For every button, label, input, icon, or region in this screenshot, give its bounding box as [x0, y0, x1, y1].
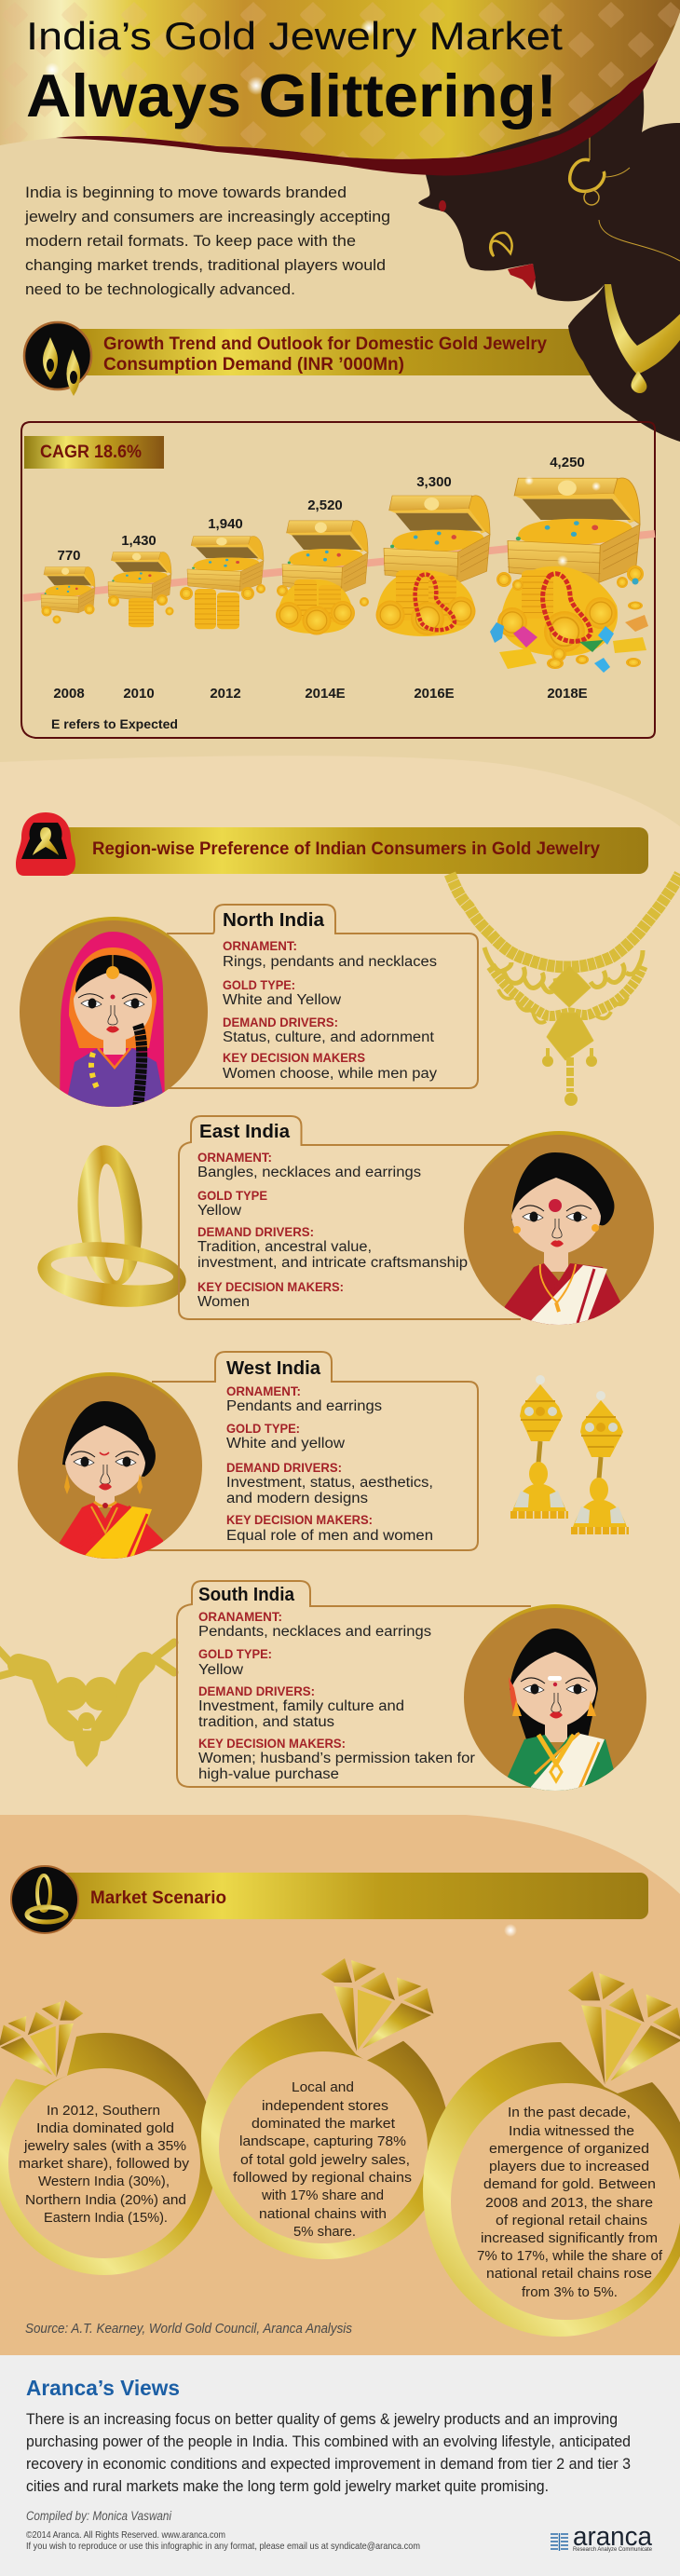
ring 3 text: increased significantly from	[481, 2230, 658, 2246]
title: Always Glittering!	[26, 61, 557, 129]
text block: views: recovery in economic conditions and expected improvement in demand from tier 2 and tier 3	[26, 2455, 631, 2473]
panel: North India: Rings, pendants and necklaces	[223, 954, 437, 970]
credits	[26, 2509, 420, 2552]
CAGR label: CAGR 18.6%	[40, 443, 142, 462]
ring 1 text: Northern India (20%) and	[25, 2192, 186, 2208]
ring 1: regional sales	[0, 1994, 217, 2275]
ring 3 text: India witnessed the	[509, 2123, 634, 2139]
panel: South India	[177, 1581, 531, 1787]
right earring	[571, 1391, 629, 1531]
panel: West India: GOLD TYPE:	[226, 1422, 300, 1436]
heading: Aranca's Views: Aranca’s Views	[26, 2376, 180, 2400]
ring 3 text: players due to increased	[489, 2159, 649, 2174]
panel: East India: GOLD TYPE	[197, 1189, 267, 1203]
ring 2 text: dominated the market	[252, 2116, 396, 2132]
trend line	[23, 534, 655, 598]
portrait: North India woman	[20, 917, 208, 1109]
panel: West India: Investment, status, aesthetics,	[226, 1475, 433, 1491]
panel: East India: ORNAMENT:	[197, 1151, 272, 1165]
ring 1 text: Eastern India (15%).	[44, 2210, 168, 2226]
chart values: 1,940	[208, 516, 243, 532]
icon: earrings	[24, 322, 91, 396]
ring 3 text: national retail chains rose	[486, 2266, 652, 2282]
chart values: 3,300	[416, 474, 452, 490]
panel: West India: West India	[226, 1358, 321, 1379]
ring 2 text: independent stores	[262, 2098, 388, 2114]
ring 3 text: In the past decade,	[508, 2105, 631, 2120]
illustration: south necklace	[0, 1642, 174, 1766]
text block: views: purchasing power of the people in India. This combined with an evolving lifestyle, anticipated	[26, 2433, 631, 2450]
ring 3 text: emergence of organized	[489, 2141, 649, 2157]
panel: South India: South India	[198, 1585, 295, 1605]
section banner: growth trend: Consumption Demand (INR ’000Mn)	[103, 355, 404, 375]
panel: North India: DEMAND DRIVERS:	[223, 1015, 338, 1029]
panel: East India	[179, 1116, 521, 1319]
intro text: changing market trends, traditional players would	[25, 256, 386, 274]
chest 2018E with gems	[490, 476, 648, 673]
panel: North India: North India	[223, 910, 325, 931]
chart panel	[21, 422, 655, 738]
panel: South India: GOLD TYPE:	[198, 1647, 272, 1661]
jewelry: nose ring and earring	[490, 130, 680, 261]
panel: East India: Tradition, ancestral value,	[197, 1239, 372, 1255]
title	[26, 14, 563, 129]
portrait: West India woman	[18, 1372, 202, 1565]
ring 3 text: 2008 and 2013, the share	[485, 2195, 653, 2211]
section banner: market scenario	[11, 1866, 648, 1933]
section banner: market scenario: Market Scenario	[90, 1888, 226, 1908]
chart note: E refers to Expected	[51, 716, 178, 731]
panel: South India: Pendants, necklaces and earrings	[198, 1624, 431, 1640]
panel: West India: ORNAMENT:	[226, 1384, 301, 1398]
chest 2012	[180, 537, 265, 629]
panel: North India: Status, culture, and adornment	[223, 1029, 435, 1045]
intro text: modern retail formats. To keep pace with the	[25, 232, 356, 250]
maroon swoosh	[56, 59, 659, 176]
ring 1 text: jewelry sales (with a 35%	[23, 2138, 186, 2154]
CAGR label	[24, 436, 164, 469]
ring 3 text: 7% to 17%, while the share of	[477, 2248, 663, 2264]
panel: West India: DEMAND DRIVERS:	[226, 1461, 342, 1475]
ring 3: organized players	[423, 1956, 680, 2337]
ring 1 text	[19, 2103, 190, 2226]
ring 1 text: market share), followed by	[19, 2156, 190, 2172]
icon: rings	[11, 1866, 78, 1933]
logo: aranca: aranca	[573, 2522, 653, 2552]
panel: South India: Investment, family culture and	[198, 1698, 404, 1714]
panel: South India: tradition, and status	[198, 1714, 334, 1730]
intro text: jewelry and consumers are increasingly accepting	[24, 208, 390, 225]
illustration: gold bangles	[34, 1142, 189, 1314]
ring 3 text	[477, 2105, 663, 2300]
panel: North India: Women choose, while men pay	[223, 1066, 437, 1082]
chest 2008	[41, 566, 95, 624]
panel: South India: KEY DECISION MAKERS:	[198, 1737, 346, 1751]
panel: West India: Pendants and earrings	[226, 1398, 382, 1414]
woman silhouette	[418, 79, 680, 442]
portrait: East India woman	[464, 1131, 654, 1328]
ring 2 text: national chains with	[259, 2206, 387, 2222]
section banner: region-wise	[16, 812, 648, 876]
chart values: 1,430	[121, 533, 156, 549]
panel: South India: Women; husband’s permission taken for	[198, 1751, 475, 1766]
chart values	[57, 455, 585, 564]
panel: North India: GOLD TYPE:	[223, 978, 295, 992]
ring 3 text: of regional retail chains	[496, 2213, 647, 2228]
chart years: 2016E	[414, 686, 455, 702]
left earring	[510, 1375, 568, 1515]
ring 2 text: followed by regional chains	[233, 2170, 412, 2186]
credits: Compiled by: Monica Vaswani	[26, 2509, 172, 2523]
ring 2 text: with 17% share and	[261, 2188, 384, 2203]
panel: East India: Bangles, necklaces and earrings	[197, 1165, 421, 1180]
intro text: India is beginning to move towards branded	[25, 184, 347, 201]
panel: East India: Women	[197, 1294, 250, 1310]
chart years: 2010	[123, 686, 155, 702]
chart years: 2012	[210, 686, 241, 702]
panel: South India: DEMAND DRIVERS:	[198, 1684, 315, 1698]
illustration: jhumka earrings	[510, 1375, 629, 1531]
panel: East India: East India	[199, 1122, 291, 1142]
chart years: 2014E	[305, 686, 346, 702]
section banner: region-wise: Region-wise Preference of Indian Consumers in Gold Jewelry	[92, 839, 600, 859]
panel: East India: DEMAND DRIVERS:	[197, 1225, 314, 1239]
text block: views: cities and rural markets make the long term gold jewelry market quite promising.	[26, 2477, 549, 2495]
ring 2 text: landscape, capturing 78%	[239, 2133, 406, 2149]
section banner: growth trend: Growth Trend and Outlook for Domestic Gold Jewelry	[103, 334, 547, 354]
panel: West India: and modern designs	[226, 1491, 368, 1506]
ring 1 text: In 2012, Southern	[47, 2103, 160, 2119]
ring 2 text	[233, 2079, 412, 2240]
ring 2 text: Local and	[292, 2079, 354, 2095]
text block: views: There is an increasing focus on better quality of gems & jewelry products and an improving	[26, 2410, 618, 2428]
panel: South India: Yellow	[198, 1662, 244, 1678]
chest 2016E	[376, 496, 490, 636]
chart values: 4,250	[550, 455, 585, 470]
illustration: gold necklace	[450, 874, 680, 1106]
ring 2 text: 5% share.	[293, 2224, 356, 2240]
panel: East India: Yellow	[197, 1203, 242, 1219]
text block: views	[26, 2410, 631, 2495]
chest 2010	[108, 552, 173, 627]
intro text: need to be technologically advanced.	[25, 280, 295, 298]
panel: North India: KEY DECISION MAKERS	[223, 1051, 365, 1065]
chart values: 2,520	[307, 497, 343, 513]
panel: East India: KEY DECISION MAKERS:	[197, 1280, 344, 1294]
chest 2014E	[276, 521, 369, 635]
panel: East India: investment, and intricate craftsmanship	[197, 1255, 468, 1271]
panel: South India: high-value purchase	[198, 1766, 339, 1782]
panel: West India	[140, 1352, 478, 1550]
title: India’s Gold Jewelry Market	[26, 14, 563, 58]
panel: North India: ORNAMENT:	[223, 939, 297, 953]
panel: West India: KEY DECISION MAKERS:	[226, 1513, 373, 1527]
bindi and lips	[439, 200, 536, 290]
chart years: 2008	[53, 686, 85, 702]
panel: North India	[163, 905, 478, 1088]
source note: Source: A.T. Kearney, World Gold Council, Aranca Analysis	[25, 2322, 352, 2337]
section banner: growth trend	[24, 322, 619, 396]
credits: If you wish to reproduce or use this infographic in any format, please email us at syndicate@aranca.com	[26, 2541, 420, 2552]
credits: ©2014 Aranca. All Rights Reserved. www.aranca.com	[26, 2529, 225, 2541]
ring 1 text: Western India (30%),	[38, 2174, 170, 2189]
chart years: 2018E	[547, 686, 588, 702]
intro text	[24, 184, 390, 298]
portrait: South India woman	[464, 1604, 646, 1793]
ring 2 text: of total gold jewelry sales,	[240, 2152, 410, 2168]
ring 3 text: demand for gold. Between	[483, 2176, 656, 2192]
icon: necklace stand	[16, 812, 75, 876]
logo: aranca: Research Analyze Communicate	[573, 2546, 652, 2553]
panel: North India: White and Yellow	[223, 992, 342, 1008]
chart years	[53, 686, 588, 702]
panel: West India: White and yellow	[226, 1436, 346, 1452]
ring 1 text: India dominated gold	[36, 2120, 174, 2136]
panel: South India: ORANAMENT:	[198, 1610, 282, 1624]
chart values: 770	[57, 548, 81, 564]
ring 2: store formats	[201, 1956, 449, 2259]
sparkle	[504, 1924, 517, 1937]
ring 3 text: from 3% to 5%.	[522, 2284, 618, 2300]
header gold band	[0, 0, 680, 159]
necklace	[605, 284, 680, 393]
panel: West India: Equal role of men and women	[226, 1528, 433, 1544]
